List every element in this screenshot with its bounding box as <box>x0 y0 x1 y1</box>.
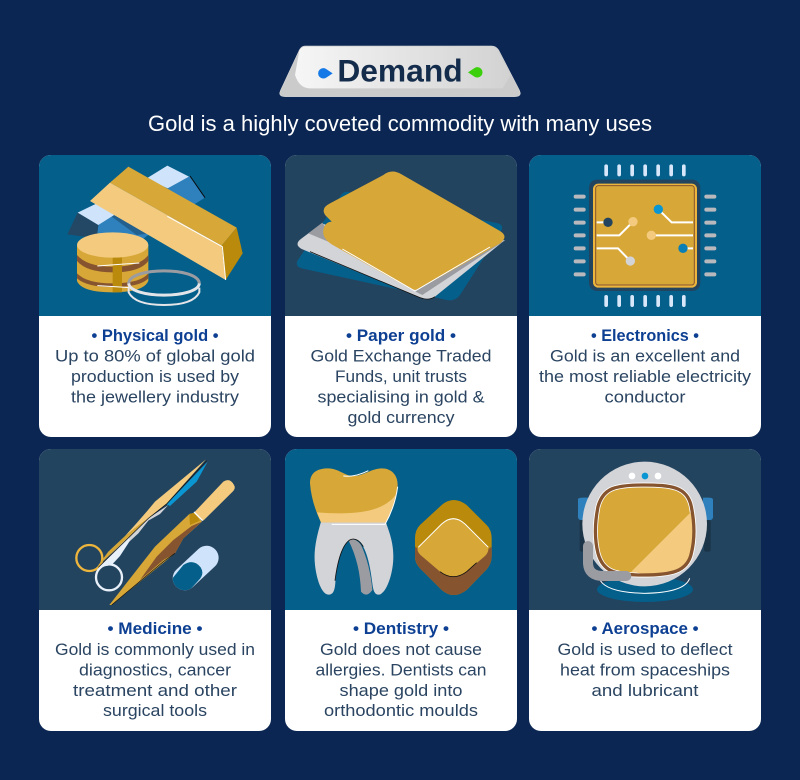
text: electronics <box>539 326 752 406</box>
title plaque <box>280 46 520 97</box>
text: physical gold: production is used by <box>71 367 240 386</box>
text: dentistry <box>316 619 486 720</box>
text: dentistry: orthodontic moulds <box>324 701 478 720</box>
text: paper gold: Funds, unit trusts <box>335 367 467 386</box>
icon: gold-capped tooth <box>310 468 398 595</box>
panel: physical gold <box>39 155 271 437</box>
text: paper gold: • Paper gold • <box>346 326 456 345</box>
panel: electronics <box>529 155 761 437</box>
text: medicine: surgical tools <box>103 701 207 720</box>
text: dentistry: • Dentistry • <box>353 619 449 638</box>
text: medicine: • Medicine • <box>108 619 203 638</box>
text: medicine: treatment and other <box>73 681 237 700</box>
text: aerospace: • Aerospace • <box>592 619 699 638</box>
icon: blue drop <box>318 68 333 79</box>
icon: astronaut helmet <box>578 462 713 602</box>
icon: gold microchip <box>574 164 716 307</box>
icon: green drop <box>468 67 483 78</box>
text: physical gold: Up to 80% of global gold <box>55 346 255 366</box>
text: medicine: Gold is commonly used in <box>55 640 255 659</box>
text: paper gold: gold currency <box>348 408 455 427</box>
text: aerospace: Gold is used to deflect <box>558 640 733 659</box>
text: physical gold <box>55 326 255 406</box>
panel: medicine <box>39 449 271 731</box>
text: electronics: • Electronics • <box>591 326 699 345</box>
text: electronics: Gold is an excellent and <box>550 346 740 366</box>
text: dentistry: allergies. Dentists can <box>316 660 486 680</box>
text: electronics: conductor <box>604 388 686 406</box>
scissors <box>76 459 208 590</box>
icon: stacked gold documents <box>297 171 506 300</box>
heading: Demand <box>337 53 463 88</box>
text: aerospace: and lubricant <box>592 681 699 700</box>
panel: dentistry <box>285 449 517 731</box>
text: physical gold: the jewellery industry <box>71 388 240 406</box>
capsule <box>172 546 219 590</box>
text: aerospace <box>558 619 733 700</box>
text: electronics: the most reliable electricity <box>539 367 752 386</box>
icon: surgical tools and capsule <box>76 459 235 605</box>
icon: gold orthodontic mould <box>415 500 492 595</box>
text: medicine <box>55 619 255 720</box>
text: paper gold: Gold Exchange Traded <box>310 346 492 366</box>
tweezers <box>109 480 235 605</box>
text: dentistry: shape gold into <box>340 681 462 700</box>
panel: aerospace <box>529 449 761 731</box>
text: physical gold: • Physical gold • <box>92 326 219 345</box>
text: paper gold: specialising in gold & <box>318 388 485 406</box>
text: aerospace: heat from spaceships <box>560 660 730 680</box>
panel: paper gold <box>285 155 517 437</box>
subtitle: Gold is a highly coveted commodity with many uses <box>148 111 652 136</box>
text: medicine: diagnostics, cancer <box>79 660 231 680</box>
icon: gold bar and coins <box>67 166 243 305</box>
text: dentistry: Gold does not cause <box>320 640 482 659</box>
text: paper gold <box>310 326 492 427</box>
